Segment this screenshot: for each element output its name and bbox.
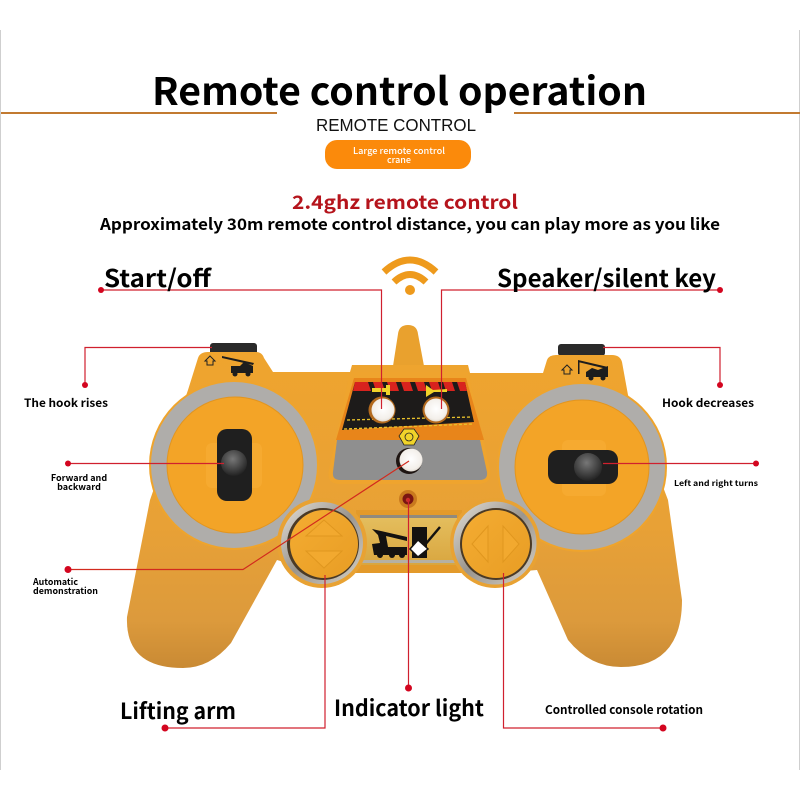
callout: forward and backward: Forward and [51, 471, 107, 484]
center panel [328, 372, 490, 484]
yellow dashes [344, 417, 473, 429]
orange pill label: crane [387, 153, 411, 166]
grey plate [333, 440, 487, 480]
title rules [1, 112, 800, 114]
callout: left and right turns: Left and right turns [674, 478, 758, 489]
callout: automatic demonstration: demonstration [33, 584, 98, 597]
right joystick [497, 382, 667, 552]
icon: horn [426, 385, 447, 397]
description: Approximately 30m remote control distance, you can play more as you like [99, 211, 720, 235]
black print area [342, 382, 474, 430]
icon: wifi [384, 260, 436, 295]
red hazard strip [353, 382, 467, 391]
callout: hook rises [24, 348, 212, 411]
controller [127, 325, 682, 668]
callout: hook decreases: Hook decreases [662, 395, 755, 411]
antenna [393, 325, 424, 366]
callout: automatic demonstration: Automatic [32, 575, 78, 588]
center label plate [356, 510, 462, 573]
icon: key [372, 385, 390, 395]
callout: indicator light: Indicator light [334, 691, 484, 723]
orange pill label: Large remote control [353, 144, 445, 157]
orange pill label [325, 140, 471, 169]
callout: lifting arm [120, 575, 325, 732]
callout: start/off [98, 259, 382, 409]
demo button [396, 448, 422, 474]
callout: forward and backward [51, 460, 224, 493]
heading: 2.4ghz: 2.4ghz remote control [292, 188, 518, 215]
right dial [450, 498, 540, 588]
callout: automatic demonstration [32, 461, 409, 597]
callout: start/off: Start/off [104, 259, 213, 294]
indicator lamp [399, 490, 417, 508]
callout: indicator light [334, 499, 484, 723]
controller body [127, 352, 682, 668]
speaker button [422, 396, 450, 424]
callout: hook decreases [603, 348, 755, 411]
callout: lifting arm: Lifting arm [120, 694, 236, 726]
icon: hexagon [399, 429, 419, 445]
right shoulder icon [562, 360, 608, 380]
title: Remote control operation [152, 61, 647, 116]
callout: speaker/silent key [442, 259, 723, 409]
left joystick [149, 380, 319, 550]
callout: speaker/silent key: Speaker/silent key [497, 259, 716, 294]
left dial [277, 498, 367, 588]
start button [368, 396, 396, 424]
callout: controlled console rotation: Controlled console rotation [545, 701, 703, 718]
left shoulder icon [205, 356, 254, 376]
callout: left and right turns [603, 460, 759, 489]
callout: controlled console rotation [504, 573, 703, 732]
callout: forward and backward: backward [57, 480, 101, 493]
callout: hook rises: The hook rises [24, 395, 109, 411]
subtitle: REMOTE CONTROL [316, 115, 476, 135]
shoulder buttons [210, 343, 605, 356]
